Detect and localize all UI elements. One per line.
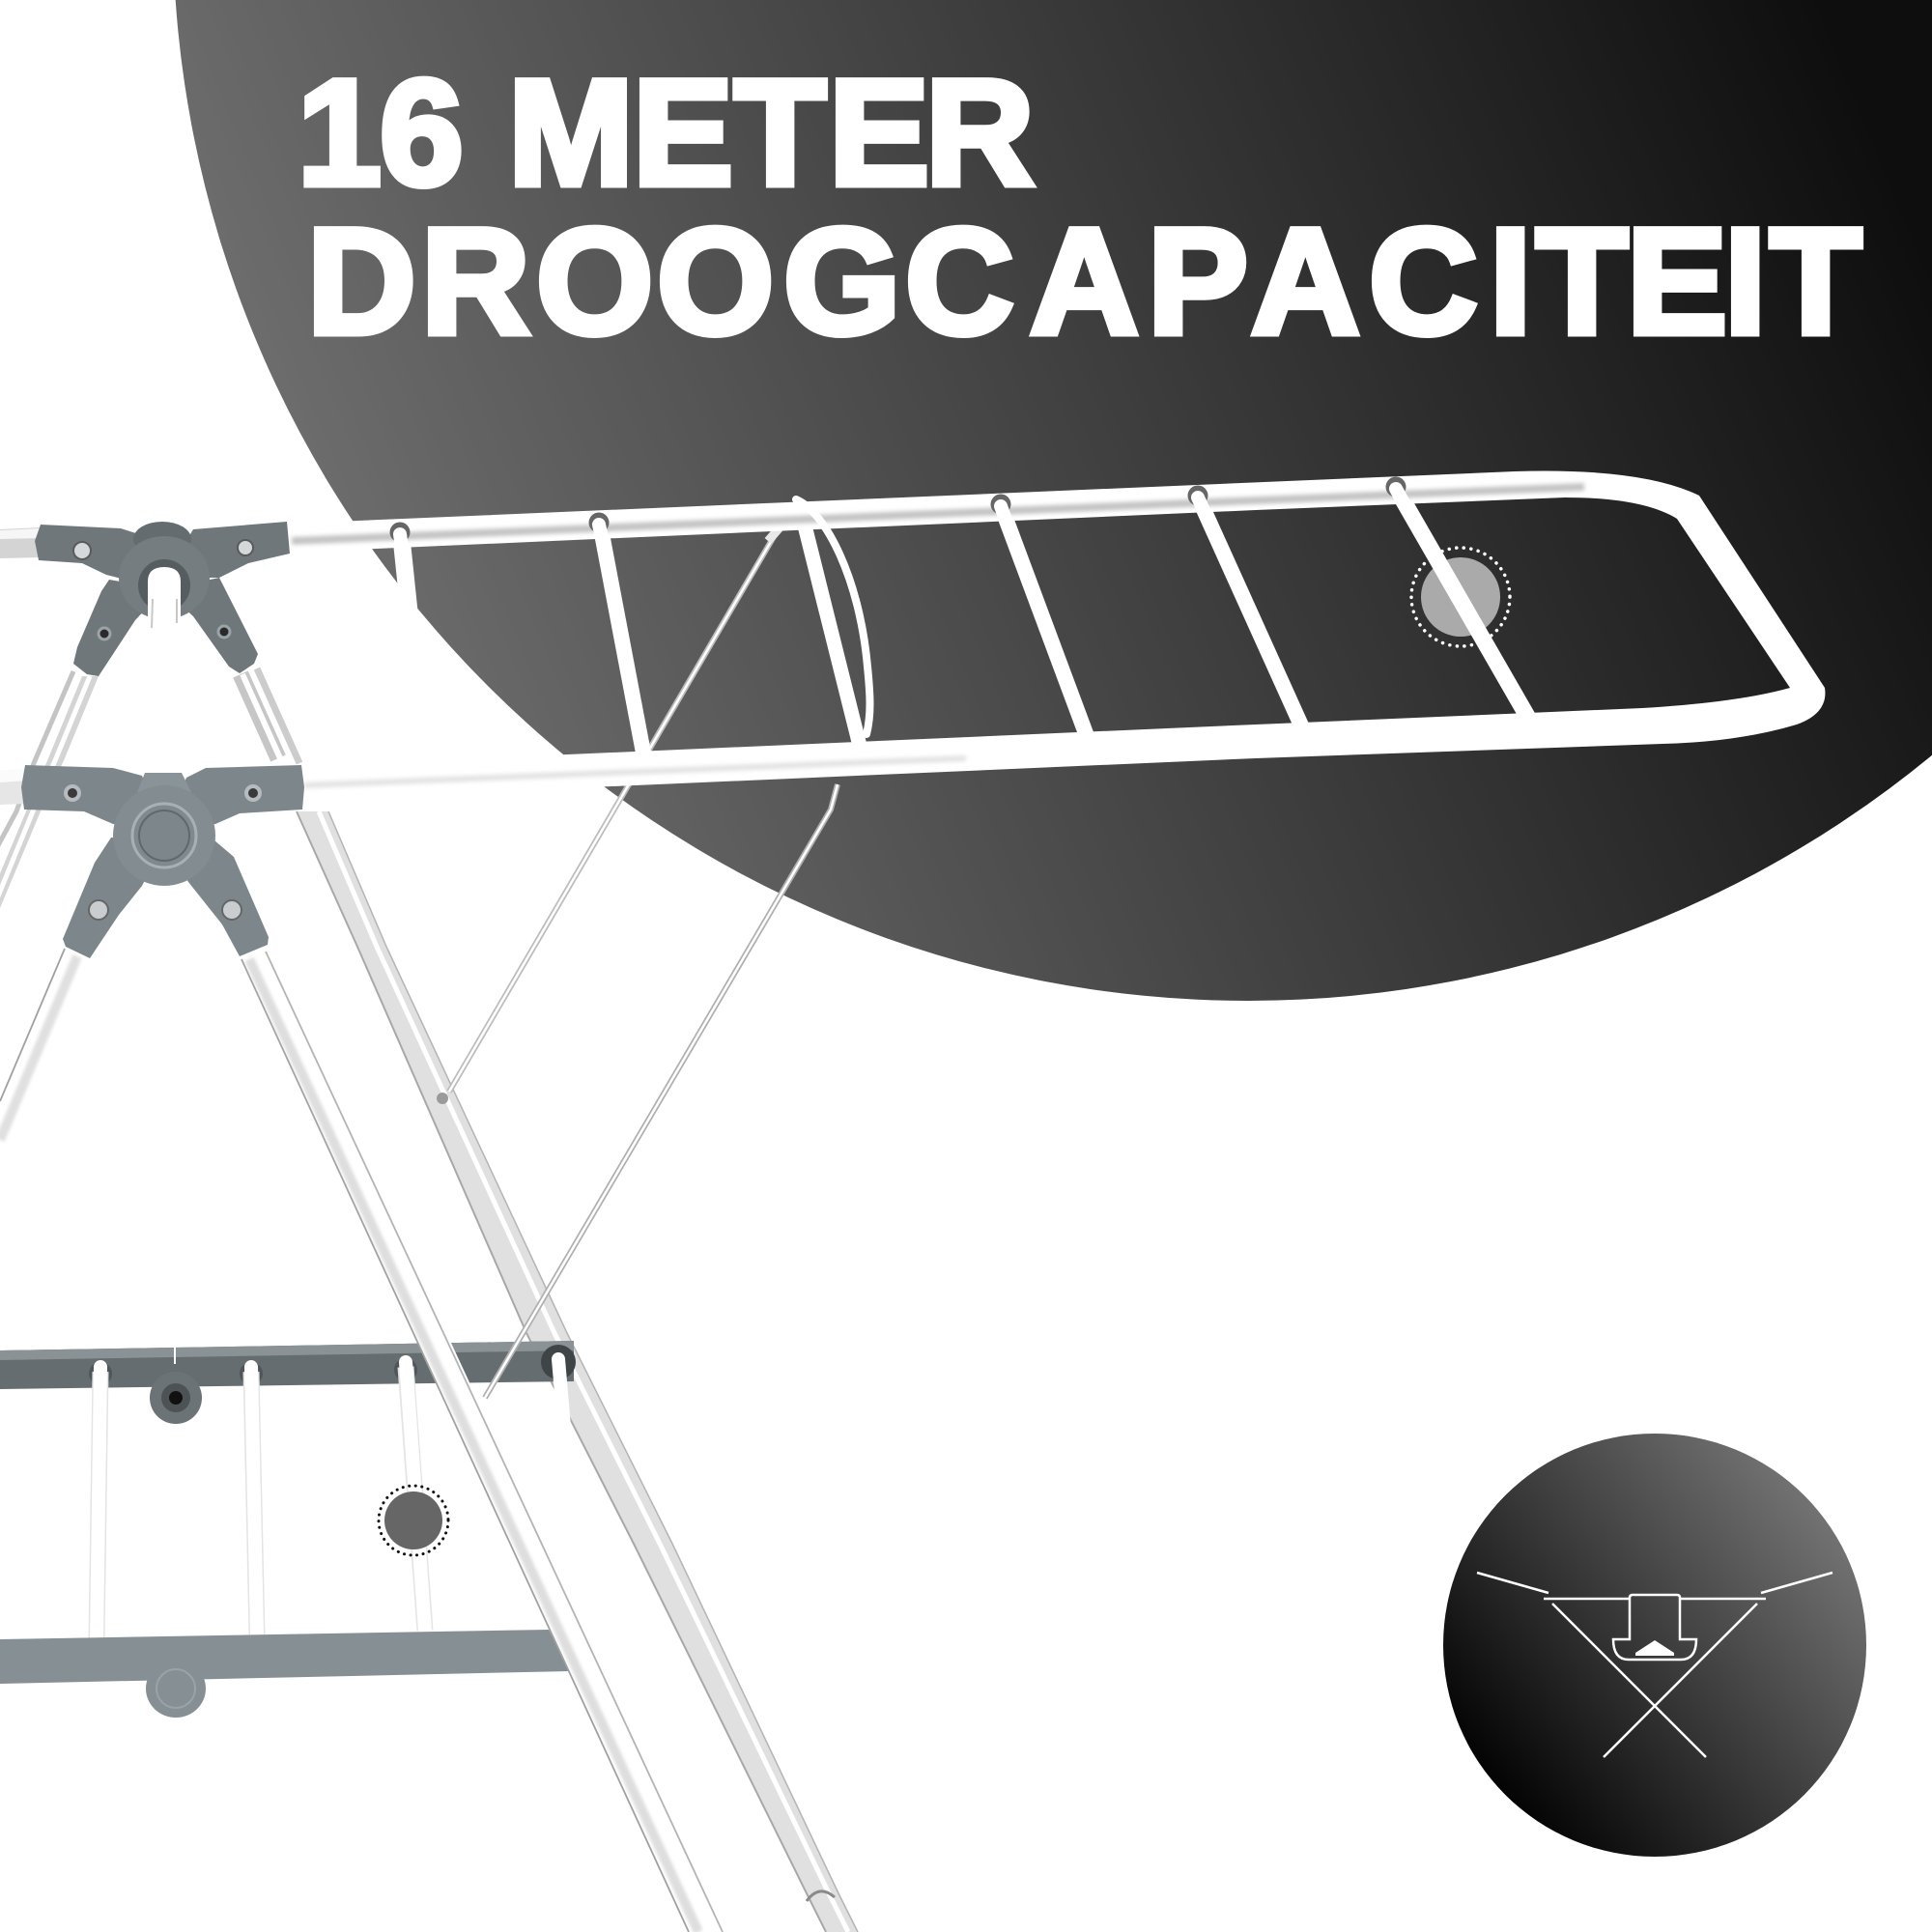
hinge bow: [796, 499, 869, 734]
lower shelf rod sockets: [89, 1358, 417, 1385]
upper joint: [35, 522, 290, 676]
back leg right: [241, 668, 858, 1932]
dark gradient circle background: [173, 0, 1932, 1001]
title: [298, 49, 1861, 366]
upper frame tube: [289, 471, 1825, 800]
lower shelf rods: [97, 1359, 578, 1639]
callout dot on upper arm: [1411, 548, 1510, 646]
lower shelf back bar with rods: [0, 1341, 578, 1718]
upper rods: [401, 488, 1536, 773]
tension wires: [437, 502, 838, 1398]
front joint: [21, 765, 304, 958]
lower shelf front bar: [0, 1630, 570, 1684]
title: 16 METER: [298, 49, 1035, 217]
lower shelf hub, back: [150, 1372, 202, 1424]
front leg left: [0, 949, 94, 1172]
icon badge: rack cross-section: [1443, 1434, 1866, 1857]
centre vertical tube: [148, 567, 181, 773]
lower shelf hub, front: [146, 1660, 206, 1718]
front leg right: [242, 952, 724, 1932]
rod sockets on frame: [390, 477, 1406, 554]
left rail stubs: [0, 527, 41, 805]
title: DROOGCAPACITEIT: [307, 198, 1861, 366]
back leg left: [0, 671, 99, 908]
callout dot on lower shelf: [379, 1486, 448, 1555]
